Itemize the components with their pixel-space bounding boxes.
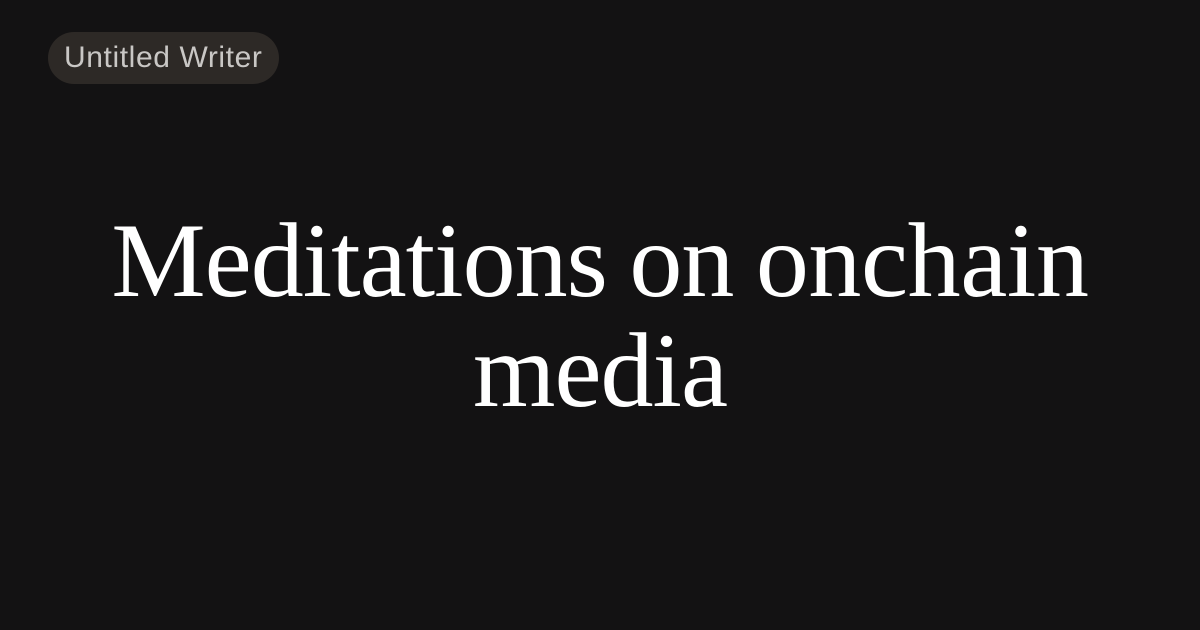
tag: publication name [48,32,279,84]
title [111,202,1089,429]
title: Meditations on onchain [111,202,1089,319]
tag: publication name: Untitled Writer [64,41,262,74]
title: media [473,312,727,429]
